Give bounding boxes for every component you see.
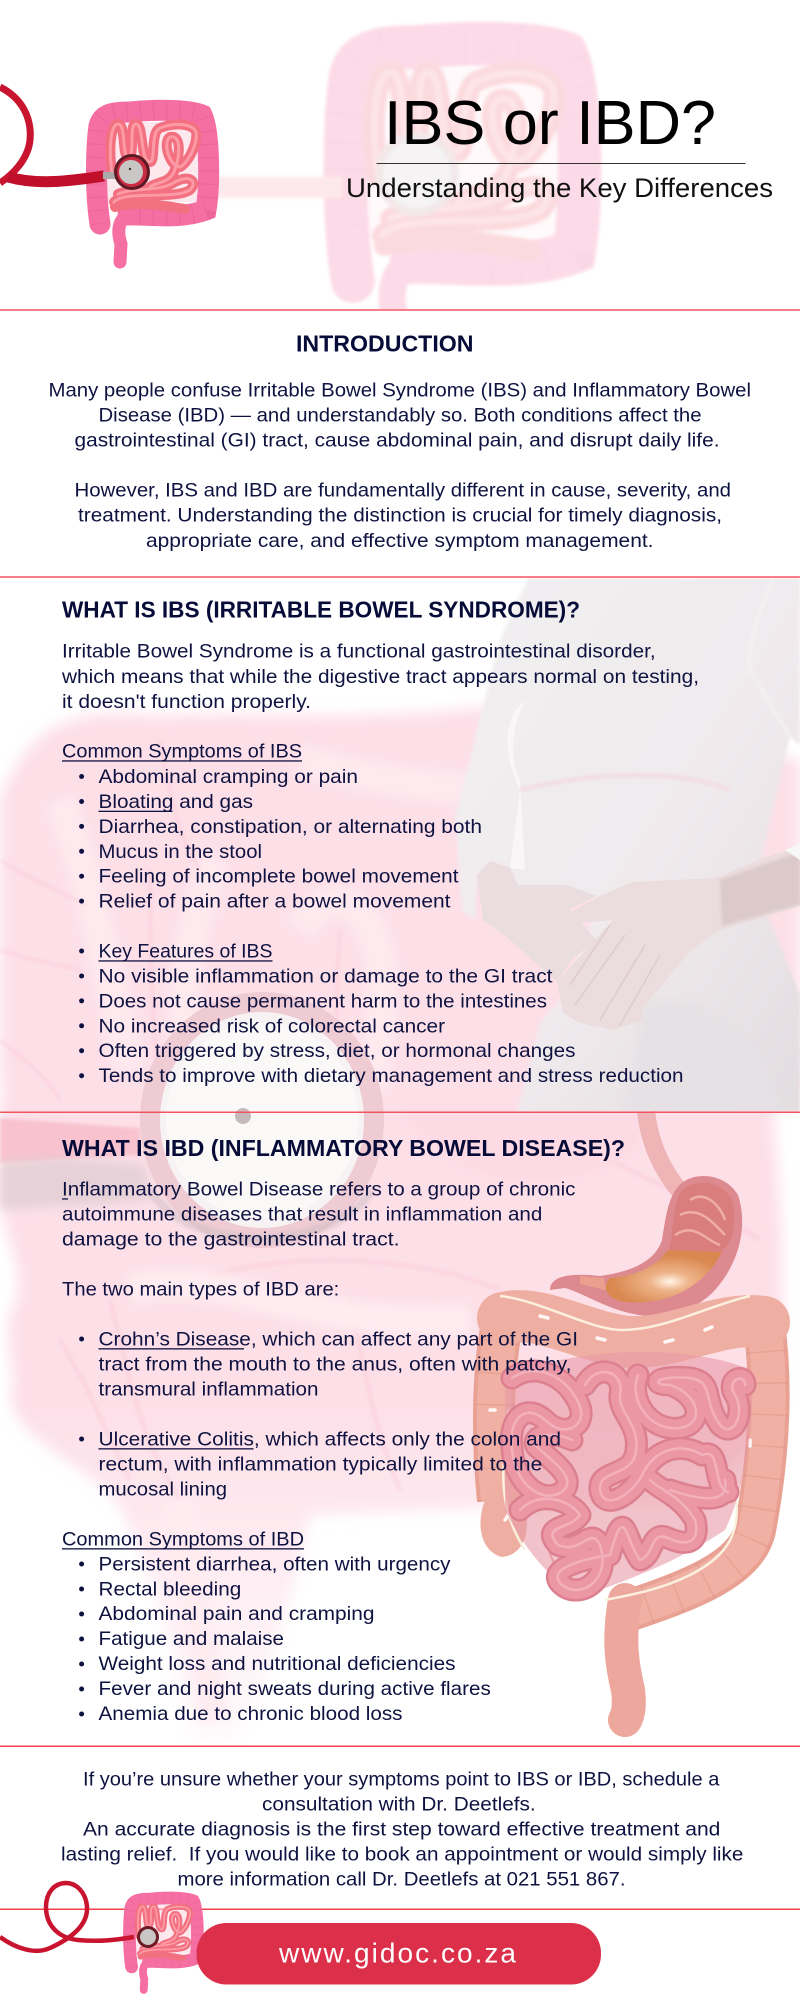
list: common symptoms of IBS: Mucus in the stool	[98, 841, 262, 863]
text: intro paragraphs: gastrointestinal (GI) tract, cause abdominal pain, and disrupt daily life.	[74, 430, 720, 452]
header washed colon image	[217, 44, 580, 360]
section divider: closing top	[0, 1746, 800, 1747]
list: types of IBD: transmural inflammation	[98, 1378, 318, 1400]
left hand	[477, 861, 597, 982]
list: common symptoms of IBS: Bloating and gas	[98, 791, 253, 813]
large intestine	[480, 1296, 769, 1720]
list: types of IBD: tract from the mouth to the anus, often with patchy,	[98, 1353, 572, 1375]
list: key features of IBS	[79, 941, 684, 1087]
title: IBS or IBD?	[384, 89, 716, 158]
list: common symptoms of IBD: Persistent diarrhea, often with urgency	[98, 1553, 451, 1575]
list: common symptoms of IBS: Diarrhea, constipation, or alternating both	[98, 816, 482, 838]
list: types of IBD	[79, 1328, 578, 1500]
esophagus	[646, 1112, 682, 1194]
washed colon and stethoscope background	[0, 708, 800, 1746]
text: closing call to action: If you’re unsure whether your symptoms point to IBS or IBD, schedule a	[83, 1769, 720, 1791]
panel: what is IBD	[62, 1135, 625, 1725]
text: closing call to action: consultation with Dr. Deetlefs.	[262, 1794, 536, 1816]
list: key features of IBS: Tends to improve with dietary management and stress reduction	[98, 1065, 684, 1087]
icon: intestine with stethoscope	[0, 87, 209, 262]
photo: woman holding abdomen	[455, 578, 800, 1112]
text: IBS definition: it doesn't function properly.	[62, 691, 311, 713]
list: types of IBD: rectum, with inflammation typically limited to the	[98, 1453, 542, 1475]
list: key features of IBS: No increased risk of colorectal cancer	[98, 1015, 446, 1037]
text: IBS definition: which means that while the digestive tract appears normal on testing,	[61, 666, 699, 688]
text: closing call to action: lasting relief. If you would like to book an appointment or would simply like	[61, 1844, 743, 1866]
text: IBD definition: Inflammatory Bowel Disease refers to a group of chronic	[62, 1179, 576, 1201]
text: intro paragraphs: appropriate care, and effective symptom management.	[146, 530, 654, 552]
list: common symptoms of IBD: Common Symptoms of IBD	[62, 1528, 304, 1550]
list: common symptoms of IBS: Feeling of incomplete bowel movement	[98, 866, 459, 888]
list: types of IBD: Crohn’s Disease, which can affect any part of the GI	[98, 1328, 578, 1350]
list: common symptoms of IBD: Abdominal pain and cramping	[98, 1603, 374, 1625]
text: IBD definition	[62, 1179, 576, 1300]
list: common symptoms of IBS: Common Symptoms of IBS	[62, 741, 302, 763]
list: common symptoms of IBS	[62, 741, 482, 913]
text: IBD definition: damage to the gastrointestinal tract.	[62, 1228, 400, 1250]
heading: IBS: WHAT IS IBS (IRRITABLE BOWEL SYNDROME)?	[62, 596, 580, 622]
list: common symptoms of IBD	[62, 1528, 491, 1725]
footer divider	[0, 1908, 800, 1910]
text: IBD definition: autoimmune diseases that result in inflammation and	[62, 1204, 542, 1226]
list: key features of IBS: Does not cause permanent harm to the intestines	[98, 990, 547, 1012]
list: common symptoms of IBD: Anemia due to chronic blood loss	[98, 1703, 403, 1725]
icon: footer intestine with stethoscope	[0, 1883, 197, 1990]
list: key features of IBS: No visible inflammation or damage to the GI tract	[98, 966, 553, 988]
text: IBD definition: The two main types of IBD are:	[62, 1278, 339, 1300]
list: common symptoms of IBS: Relief of pain after a bowel movement	[98, 891, 451, 913]
list: types of IBD: mucosal lining	[98, 1478, 227, 1500]
text: closing call to action	[61, 1769, 743, 1891]
list: common symptoms of IBD: Fever and night sweats during active flares	[98, 1678, 491, 1700]
panel: what is IBS	[61, 596, 699, 1087]
subtitle: Understanding the Key Differences	[346, 173, 773, 203]
panel: introduction	[48, 330, 751, 552]
intro divider top	[0, 309, 800, 311]
section divider: IBS top	[0, 576, 800, 578]
text: intro paragraphs	[48, 380, 751, 552]
text: closing call to action: An accurate diagnosis is the first step toward effective treatment and	[83, 1819, 720, 1841]
text: IBS definition: Irritable Bowel Syndrome is a functional gastrointestinal disorder,	[62, 641, 656, 663]
button: website: www.gidoc.co.za	[278, 1938, 516, 1969]
heading: introduction: INTRODUCTION	[296, 330, 474, 356]
text: intro paragraphs: Disease (IBD) — and understandably so. Both conditions affect the	[98, 405, 702, 427]
text: intro paragraphs: Many people confuse Irritable Bowel Syndrome (IBS) and Inflammatory Bowel	[48, 380, 751, 402]
list: key features of IBS: Key Features of IBS	[98, 941, 272, 963]
section divider: IBD top	[0, 1112, 800, 1113]
text: intro paragraphs: treatment. Understanding the distinction is crucial for timely diagnosis,	[78, 505, 722, 527]
list: types of IBD: Ulcerative Colitis, which affects only the colon and	[98, 1428, 561, 1450]
button: website	[196, 1923, 601, 1984]
text: IBS definition	[61, 641, 699, 713]
small intestine	[505, 1352, 752, 1593]
text: closing call to action: more information call Dr. Deetlefs at 021 551 867.	[178, 1869, 626, 1891]
stomach	[550, 1176, 742, 1316]
list: common symptoms of IBS: Abdominal cramping or pain	[98, 766, 358, 788]
right hand and forearm	[557, 847, 800, 1030]
list: common symptoms of IBD: Rectal bleeding	[98, 1578, 241, 1600]
title rule	[376, 163, 746, 164]
list: common symptoms of IBD: Fatigue and malaise	[98, 1628, 284, 1650]
heading: IBD: WHAT IS IBD (INFLAMMATORY BOWEL DISEASE)?	[62, 1135, 625, 1161]
illustration: digestive system	[480, 1112, 769, 1720]
list: common symptoms of IBD: Weight loss and nutritional deficiencies	[98, 1653, 456, 1675]
text: intro paragraphs: However, IBS and IBD are fundamentally different in cause, severity, and	[74, 480, 731, 502]
list: key features of IBS: Often triggered by stress, diet, or hormonal changes	[98, 1040, 576, 1062]
torso and sleeves	[455, 578, 800, 1112]
